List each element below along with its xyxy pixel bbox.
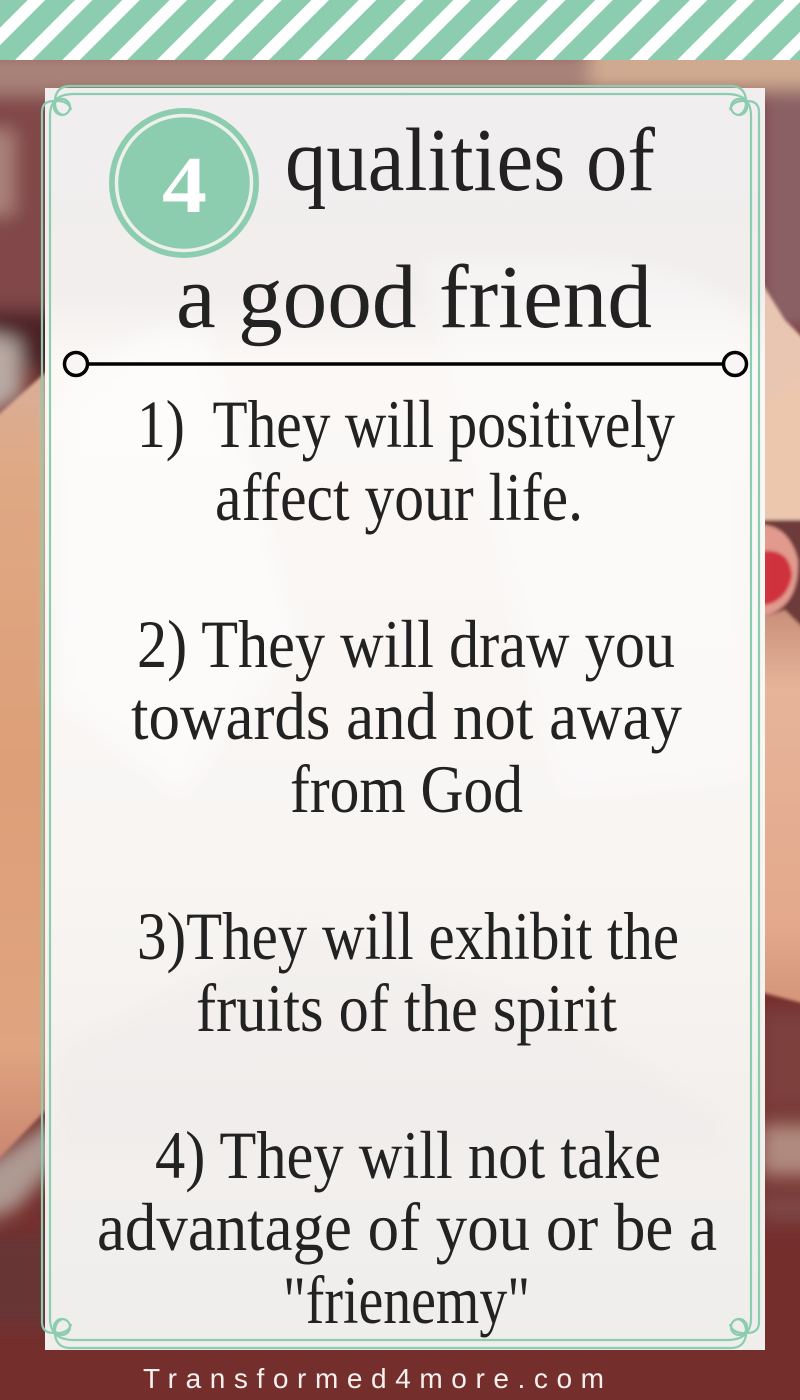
quality 4 [97,1117,717,1338]
quality 2: 2) They will draw you [137,606,675,682]
number badge: 4 [162,140,207,230]
quality 2 [131,606,682,827]
quality 1 [137,386,675,535]
quality 2: from God [290,751,523,827]
website footer: Transformed4more.com [143,1363,604,1394]
quality 4: "frienemy" [283,1262,530,1338]
top striped band [0,0,800,60]
quality 1: 1) They will positively [137,386,675,462]
corner: bottom right [400,717,759,1348]
title: qualities of [285,111,655,210]
title [176,111,655,347]
quality 4: 4) They will not take [155,1117,661,1193]
quality 3 [137,898,679,1046]
quality 3: fruits of the spirit [196,970,617,1046]
quality 1: affect your life. [215,459,583,535]
corner: top right [400,86,759,717]
corner: bottom left [42,717,401,1348]
quality 4: advantage of you or be a [97,1189,717,1265]
corner: top left [42,86,401,717]
quality 2: towards and not away [131,678,682,754]
title: a good friend [176,248,652,347]
number badge [109,108,259,258]
quality 3: 3)They will exhibit the [137,898,679,974]
divider with end circles [64,352,746,376]
